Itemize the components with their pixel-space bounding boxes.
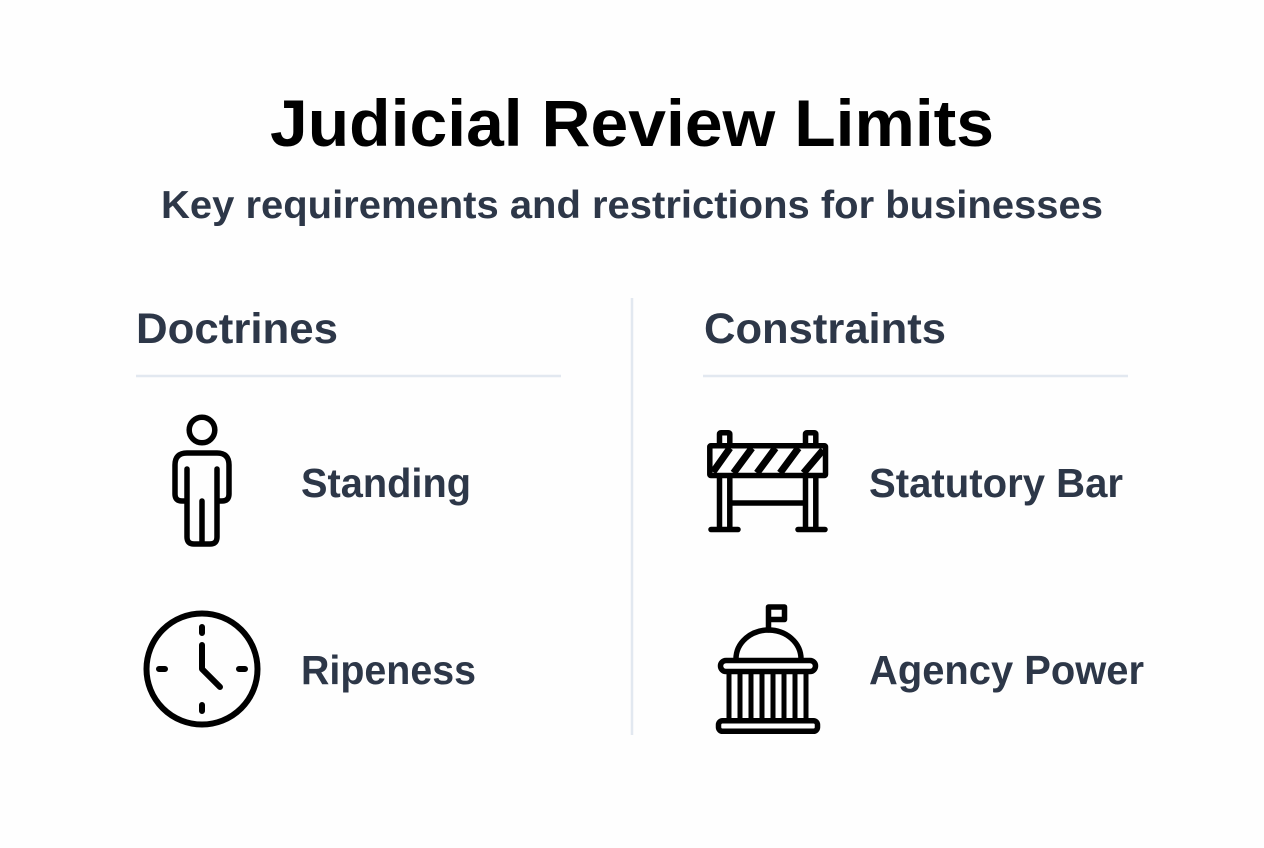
icon: clock — [146, 614, 258, 724]
subtitle: Key requirements and restrictions for businesses — [161, 184, 1103, 227]
vertical divider — [631, 298, 633, 735]
label: standing: Standing — [301, 460, 471, 506]
panel: doctrines — [136, 305, 561, 724]
label: agency power: Agency Power — [869, 647, 1144, 693]
icon: barrier — [710, 433, 826, 530]
icon: person — [175, 417, 229, 544]
heading: constraints: Constraints — [704, 305, 946, 353]
heading: doctrines: Doctrines — [136, 305, 338, 353]
panel: constraints — [703, 305, 1144, 731]
title: Judicial Review Limits — [270, 86, 994, 160]
icon: agency building — [718, 607, 818, 731]
label: ripeness: Ripeness — [301, 647, 476, 693]
label: statutory bar: Statutory Bar — [869, 460, 1123, 506]
